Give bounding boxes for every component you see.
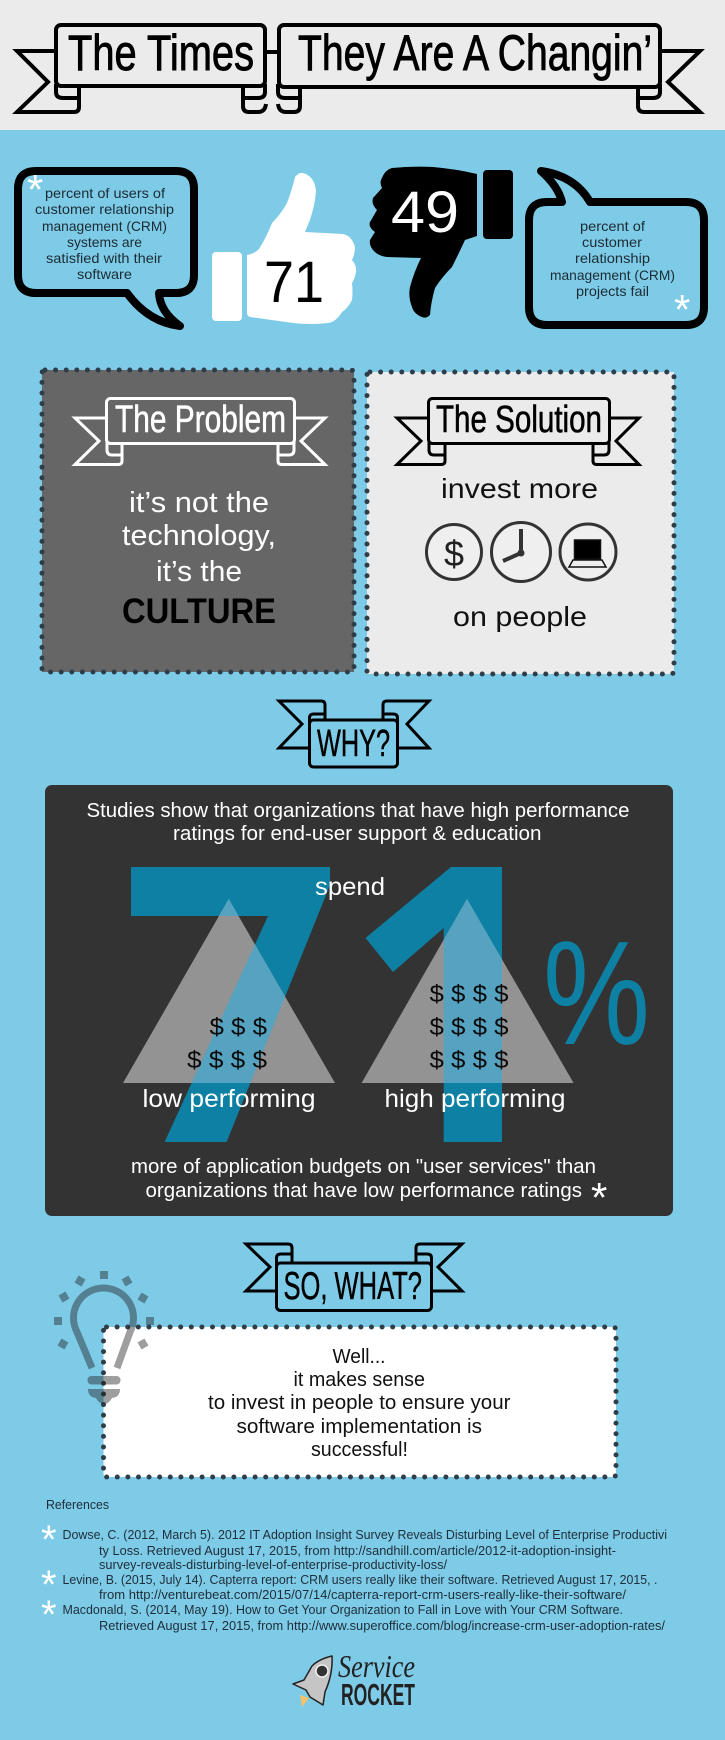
dollars low xyxy=(187,1014,267,1074)
bubble text: percent of users of xyxy=(45,185,165,201)
problem text: it’s not the xyxy=(129,487,269,519)
dollars low: $ $ $ xyxy=(210,1014,267,1041)
bubble text: projects fail xyxy=(576,283,649,299)
rocket wordmark: ROCKET xyxy=(341,1677,415,1712)
title banner xyxy=(17,25,700,112)
problem text: technology, xyxy=(122,520,276,552)
on people: on people xyxy=(453,601,587,632)
culture: CULTURE xyxy=(122,592,276,631)
well text: successful! xyxy=(311,1439,408,1461)
big 71 numeral xyxy=(131,867,502,1142)
service wordmark: Service xyxy=(338,1648,415,1684)
panel: the problem xyxy=(42,370,354,672)
banner: the solution: The Solution xyxy=(436,399,602,441)
triangle: high performing xyxy=(362,899,574,1083)
number 71: 71 xyxy=(264,250,324,315)
references xyxy=(41,1498,667,1637)
icon: clock xyxy=(492,522,550,582)
banner: the problem xyxy=(75,398,325,464)
well text: software implementation is xyxy=(236,1416,482,1438)
studies intro text xyxy=(86,800,630,845)
asterisk: * xyxy=(674,286,690,333)
problem text xyxy=(122,487,276,588)
reference 1: Dowse, C. (2012, March 5). 2012 IT Adoption Insight Survey Reveals Disturbing Level of Enterprise Productivi xyxy=(62,1528,667,1542)
studies closing text: organizations that have low performance ratings xyxy=(146,1180,582,1202)
dollars low: $ $ $ $ xyxy=(187,1047,267,1074)
bubble text: customer relationship xyxy=(35,201,174,217)
number 49: 49 xyxy=(391,180,459,245)
reference 2: Levine, B. (2015, July 14). Capterra report: CRM users really like their software. Retrieved August 17, 2015, . xyxy=(62,1573,658,1587)
header band xyxy=(0,0,725,130)
stat: 49 percent fail xyxy=(370,167,704,333)
bubble text xyxy=(35,185,174,282)
bubble text: systems are xyxy=(67,234,142,250)
bubble text xyxy=(550,218,675,299)
speech bubble right xyxy=(529,171,704,325)
studies closing text: more of application budgets on "user services" than xyxy=(131,1156,596,1178)
banner: why xyxy=(279,701,429,767)
label high performing: high performing xyxy=(384,1085,566,1113)
stat: 71 percent satisfied xyxy=(18,166,356,326)
bubble text: software xyxy=(77,266,132,282)
well text: it makes sense xyxy=(294,1369,425,1391)
panel: the solution xyxy=(367,372,674,674)
icon: dollar xyxy=(426,524,482,580)
bubble text: relationship xyxy=(575,250,650,266)
percent sign: % xyxy=(543,911,650,1076)
reference 1 xyxy=(41,1518,667,1572)
studies closing text xyxy=(131,1156,596,1202)
dollars high: $ $ $ $ xyxy=(430,981,508,1008)
dollars high: $ $ $ $ xyxy=(430,1014,508,1041)
invest more: invest more xyxy=(441,473,598,504)
bubble text: customer xyxy=(582,234,642,250)
reference 3: Retrieved August 17, 2015, from http://www.superoffice.com/blog/increase-crm-user-adoption-rates/ xyxy=(99,1619,666,1633)
banner: so what: SO, WHAT? xyxy=(284,1265,422,1308)
reference 1: * xyxy=(41,1518,57,1562)
label low performing: low performing xyxy=(142,1085,316,1113)
reference 1: ty Loss. Retrieved August 17, 2015, from http://sandhill.com/article/2012-it-adoption-insight- xyxy=(99,1544,616,1558)
banner: so what xyxy=(246,1244,462,1310)
reference 3: * xyxy=(41,1593,57,1637)
banner: the solution xyxy=(397,398,639,464)
icon: light bulb xyxy=(54,1271,154,1404)
well text xyxy=(208,1346,511,1461)
logo: service rocket xyxy=(293,1648,415,1712)
reference 2 xyxy=(41,1563,658,1607)
reference 3 xyxy=(41,1593,666,1637)
triangle: low performing xyxy=(123,899,335,1083)
spend: spend xyxy=(315,873,385,901)
icon: dollar: $ xyxy=(444,533,464,574)
icon: rocket xyxy=(293,1656,332,1707)
title text: The Times xyxy=(68,25,254,81)
asterisk: * xyxy=(27,166,43,213)
banner: why: WHY? xyxy=(317,723,390,765)
references heading: References xyxy=(46,1498,109,1512)
reference 2: from http://venturebeat.com/2015/07/14/capterra-report-crm-users-really-like-their-software/ xyxy=(99,1588,627,1602)
reference 2: * xyxy=(41,1563,57,1607)
studies intro text: ratings for end-user support & education xyxy=(173,823,542,845)
reference 1: survey-reveals-disturbing-level-of-enterprise-productivity-loss/ xyxy=(99,1558,448,1572)
asterisk: * xyxy=(591,1174,607,1221)
icon: thumbs up xyxy=(212,173,356,324)
banner: the problem: The Problem xyxy=(115,399,286,441)
bubble text: percent of xyxy=(580,218,645,234)
speech bubble left xyxy=(18,171,194,326)
bubble text: satisfied with their xyxy=(46,250,162,266)
dollars high: $ $ $ $ xyxy=(430,1047,508,1074)
icon: laptop xyxy=(560,524,616,580)
well text: Well... xyxy=(332,1346,386,1368)
panel: studies xyxy=(45,785,673,1221)
studies intro text: Studies show that organizations that have high performance xyxy=(86,800,630,822)
problem text: it’s the xyxy=(156,556,242,588)
panel: well box xyxy=(104,1327,616,1477)
reference 3: Macdonald, S. (2014, May 19). How to Get Your Organization to Fall in Love with Your CRM Software. xyxy=(62,1603,623,1617)
dollars high xyxy=(430,981,508,1074)
icon: thumbs down xyxy=(370,167,513,318)
bubble text: management (CRM) xyxy=(42,218,167,234)
well text: to invest in people to ensure your xyxy=(208,1392,511,1414)
bubble text: management (CRM) xyxy=(550,267,675,283)
